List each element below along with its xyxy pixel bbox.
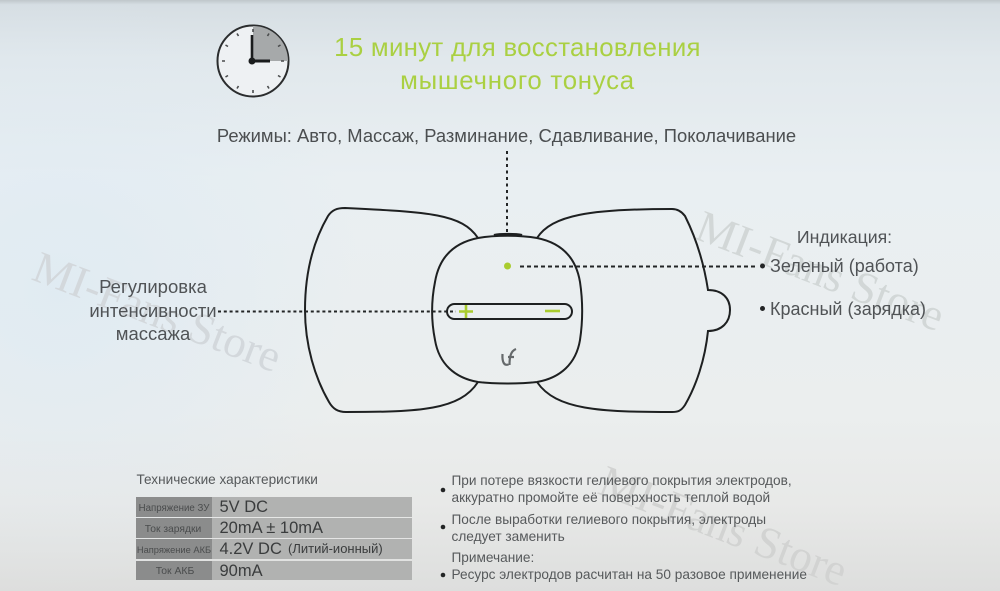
- care notes: При потере вязкости гелиевого покрытия электродов,: [452, 473, 792, 488]
- icon: clock: [218, 26, 288, 96]
- title: [334, 34, 701, 95]
- care notes: [441, 473, 807, 582]
- plus button: [459, 305, 473, 318]
- left wing: [305, 208, 478, 412]
- intensity label: интенсивности: [89, 300, 217, 321]
- watermark: MI-Fans Store left: MI-Fans Store: [26, 242, 288, 382]
- watermark: MI-Fans Store right: MI-Fans Store: [689, 201, 951, 341]
- specs table: Ток АКБ: [156, 566, 194, 577]
- specs heading: Технические характеристики: [136, 472, 318, 487]
- specs table: Ток зарядки: [145, 524, 201, 535]
- care notes: Ресурс электродов расчитан на 50 разовое применение: [452, 567, 807, 582]
- indication: red: Красный (зарядка): [770, 299, 926, 319]
- intensity label: [89, 276, 217, 344]
- intensity label: Регулировка: [99, 276, 208, 297]
- logo: [502, 349, 516, 365]
- intensity label: массажа: [116, 323, 191, 344]
- specs table: Напряжение ЗУ: [139, 503, 210, 514]
- specs table: 4.2V DC: [220, 540, 282, 558]
- care notes: Примечание:: [452, 550, 534, 565]
- indicator leader line: [520, 266, 758, 268]
- indication: green: Зеленый (работа): [770, 256, 919, 276]
- care notes: аккуратно промойте её поверхность теплой водой: [452, 490, 770, 505]
- title: мышечного тонуса: [400, 67, 635, 95]
- minus button: [545, 310, 560, 312]
- right wing with charging bump: [537, 209, 730, 412]
- specs table: (Литий-ионный): [288, 541, 383, 556]
- device illustration: [305, 208, 730, 412]
- indicator dot: [504, 262, 511, 270]
- specs table: 20mA ± 10mA: [220, 519, 323, 537]
- center unit: [432, 236, 582, 384]
- indication heading: Индикация:: [797, 227, 892, 247]
- modes label: Режимы: Авто, Массаж, Разминание, Сдавливание, Поколачивание: [217, 125, 796, 146]
- intensity slider: [447, 304, 572, 319]
- modes leader line: [506, 151, 508, 234]
- specs table: 5V DC: [220, 498, 268, 516]
- top button: [494, 234, 522, 236]
- title: 15 минут для восстановления: [334, 34, 701, 62]
- specs table: 90mA: [220, 562, 263, 580]
- specs table: [136, 497, 412, 580]
- specs table: Напряжение АКБ: [137, 545, 211, 555]
- care notes: После выработки гелиевого покрытия, электроды: [452, 512, 766, 527]
- intensity leader line: [218, 310, 456, 312]
- care notes: следует заменить: [452, 529, 565, 544]
